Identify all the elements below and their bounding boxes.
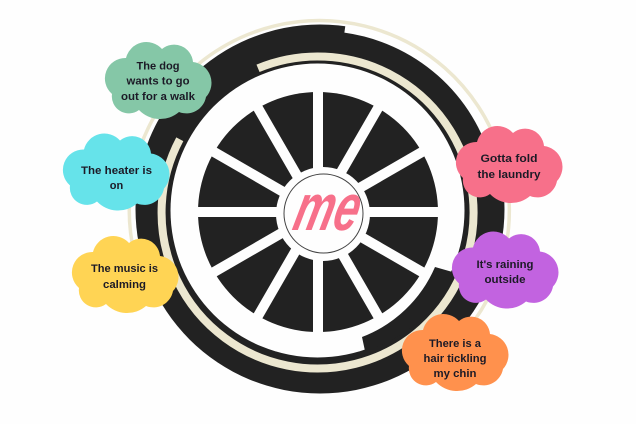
cloud: hair tickling [402,314,508,391]
cloud: heater [63,134,169,211]
cloud: raining [452,232,558,309]
cloud: music [72,236,178,313]
cloud: dog walk: The dog [136,60,180,72]
inner beige arc [162,56,474,368]
cloud: heater: The heater is [81,165,152,177]
cloud: heater: on [110,180,123,192]
cloud: dog walk: wants to go [125,76,190,88]
cloud: music: The music is [91,263,158,275]
white gap inside ring [170,64,464,358]
outer black ring [136,24,504,394]
cloud: hair tickling: hair tickling [424,353,486,365]
cloud: laundry [456,126,562,203]
center hub [276,167,370,261]
cloud: hair tickling: There is a [429,338,482,350]
cloud: raining: It's raining [476,259,534,271]
cloud: dog walk [105,42,211,119]
black ring block lower right [362,267,456,351]
outer thin beige arc [129,21,509,338]
cloud: dog walk: out for a walk [121,91,196,103]
cloud: music: calming [103,279,146,291]
cloud: laundry: Gotta fold [480,153,538,165]
cloud: raining: outside [484,274,526,286]
cloud: hair tickling: my chin [434,368,477,380]
cloud: laundry: the laundry [478,169,541,181]
wheel with twelve spokes [191,85,445,339]
center label: me: me [287,171,370,245]
